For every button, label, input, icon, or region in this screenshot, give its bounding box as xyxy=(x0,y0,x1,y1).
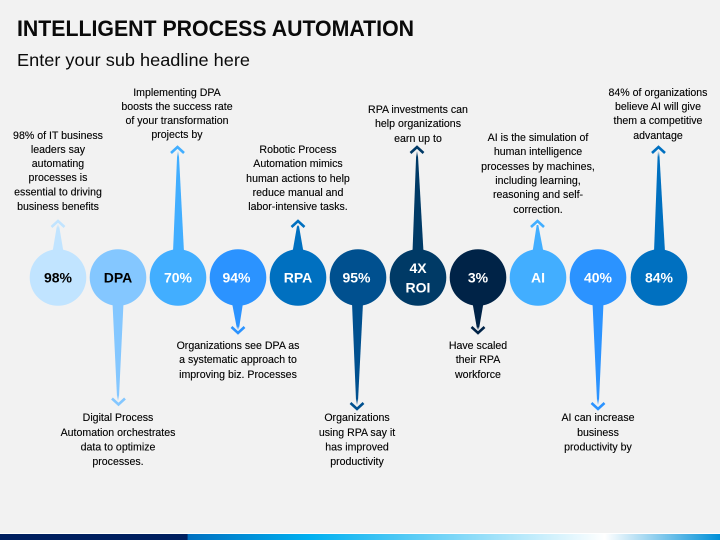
item: RPA xyxy=(246,144,350,306)
text: 94% description xyxy=(177,340,299,381)
circle: 98% xyxy=(30,249,86,306)
bottom gradient bar xyxy=(0,533,720,540)
circle: 40% xyxy=(570,249,626,306)
text: 95% description: Organizations xyxy=(324,412,390,424)
text: 95% description: using RPA say it xyxy=(319,427,395,439)
text: DPA description: Digital Process xyxy=(83,412,153,424)
text: AI description: human intelligence xyxy=(494,146,582,158)
text: 94% description: Organizations see DPA as xyxy=(177,340,299,352)
text: DPA description: data to optimize xyxy=(81,442,155,454)
arrow: 3% down xyxy=(472,303,484,333)
text: DPA description: Automation orchestrates xyxy=(61,427,175,439)
text: 98% description: business benefits xyxy=(17,201,99,213)
arrow: AI up xyxy=(531,221,544,252)
arrow: 95% down xyxy=(350,303,364,409)
text: RPA description: labor-intensive tasks. xyxy=(248,201,348,213)
text: 4X ROI description: earn up to xyxy=(394,133,442,145)
item: 84% xyxy=(609,87,707,306)
circle: 40%: 40% xyxy=(584,270,613,286)
item: 70% xyxy=(121,87,233,306)
item: 40% xyxy=(561,249,635,454)
text: 70% description: boosts the success rate xyxy=(121,101,233,113)
text: 70% description: of your transformation xyxy=(125,115,229,127)
circle: 95%: 95% xyxy=(342,270,371,286)
text: 94% description: improving biz. Processes xyxy=(179,369,297,381)
circle: 4X ROI xyxy=(390,249,446,306)
text: 95% description xyxy=(319,412,395,468)
text: 84% description: 84% of organizations xyxy=(609,87,707,99)
circle: AI xyxy=(510,249,566,306)
text: 40% description xyxy=(561,412,635,454)
text: 70% description xyxy=(121,87,233,141)
circle: 84% xyxy=(631,249,687,306)
circle: RPA xyxy=(270,249,326,306)
text: 98% description: essential to driving xyxy=(14,186,102,198)
arrow: 94% down xyxy=(232,303,244,333)
item: 98% xyxy=(13,130,103,306)
text: 98% description: automating xyxy=(32,158,84,170)
text: RPA description: Robotic Process xyxy=(259,144,337,156)
text: 3% description xyxy=(449,340,507,381)
text: 84% description xyxy=(609,87,707,142)
circle: DPA xyxy=(90,249,146,306)
text: AI description: reasoning and self- xyxy=(493,189,584,201)
text: 84% description: advantage xyxy=(633,130,683,142)
text: 70% description: projects by xyxy=(151,129,203,141)
text: 94% description: a systematic approach to xyxy=(179,354,297,366)
circle: 98%: 98% xyxy=(44,270,73,286)
text: 84% description: believe AI will give xyxy=(615,101,701,113)
text: 4X ROI description: RPA investments can xyxy=(368,104,468,116)
text: 98% description: leaders say xyxy=(31,144,86,156)
arrow: 40% down xyxy=(592,303,604,409)
text: RPA description: human actions to help xyxy=(246,173,350,185)
circle: 94%: 94% xyxy=(222,270,251,286)
title: INTELLIGENT PROCESS AUTOMATION xyxy=(17,16,414,41)
arrow: DPA down xyxy=(112,303,125,404)
text: 3% description: workforce xyxy=(454,369,501,381)
text: AI description xyxy=(481,132,595,216)
circle: AI: AI xyxy=(531,270,545,286)
text: DPA description: processes. xyxy=(92,456,144,468)
circle: RPA: RPA xyxy=(284,270,312,286)
circle: DPA: DPA xyxy=(104,270,132,286)
text: AI description: processes by machines, xyxy=(481,161,595,173)
item: 4X ROI xyxy=(368,104,468,306)
text: 4X ROI description xyxy=(368,104,468,145)
text: AI description: including learning, xyxy=(495,175,581,187)
item: DPA xyxy=(61,249,175,468)
arrow: RPA up xyxy=(292,221,304,252)
text: RPA description xyxy=(246,144,350,213)
text: AI description: correction. xyxy=(513,204,563,216)
text: 70% description: Implementing DPA xyxy=(133,87,222,99)
text: 40% description: business xyxy=(577,427,619,439)
text: AI description: AI is the simulation of xyxy=(488,132,588,144)
arrow: 98% up xyxy=(52,221,64,252)
arrow: 4X ROI up xyxy=(410,147,424,252)
text: 4X ROI description: help organizations xyxy=(375,118,461,130)
text: 40% description: AI can increase xyxy=(561,412,635,424)
item: 94% xyxy=(177,249,299,381)
arrow: 84% up xyxy=(652,147,665,252)
text: RPA description: Automation mimics xyxy=(253,158,343,170)
circle: 4X ROI: 4X xyxy=(409,260,427,276)
circle: 4X ROI: ROI xyxy=(406,280,430,296)
text: RPA description: reduce manual and xyxy=(253,187,343,199)
text: 3% description: Have scaled xyxy=(449,340,507,352)
text: 3% description: their RPA xyxy=(456,354,501,366)
subtitle: Enter your sub headline here xyxy=(17,50,250,70)
text: 98% description: processes is xyxy=(29,172,87,184)
circle: 95% xyxy=(330,249,386,306)
circle: 84%: 84% xyxy=(645,270,674,286)
text: 95% description: has improved xyxy=(325,442,389,454)
text: 98% description: 98% of IT business xyxy=(13,130,103,142)
item: AI xyxy=(481,132,595,306)
item: 95% xyxy=(319,249,395,468)
circle: 70% xyxy=(150,249,206,306)
arrow: 70% up xyxy=(171,147,184,252)
item: 3% xyxy=(449,249,507,381)
text: DPA description xyxy=(61,412,175,468)
text: 84% description: them a competitive xyxy=(614,115,703,127)
circle: 70%: 70% xyxy=(164,270,193,286)
circle: 3%: 3% xyxy=(468,270,489,286)
text: 95% description: productivity xyxy=(330,456,384,468)
text: 40% description: productivity by xyxy=(564,442,633,454)
text: 98% description xyxy=(13,130,103,213)
